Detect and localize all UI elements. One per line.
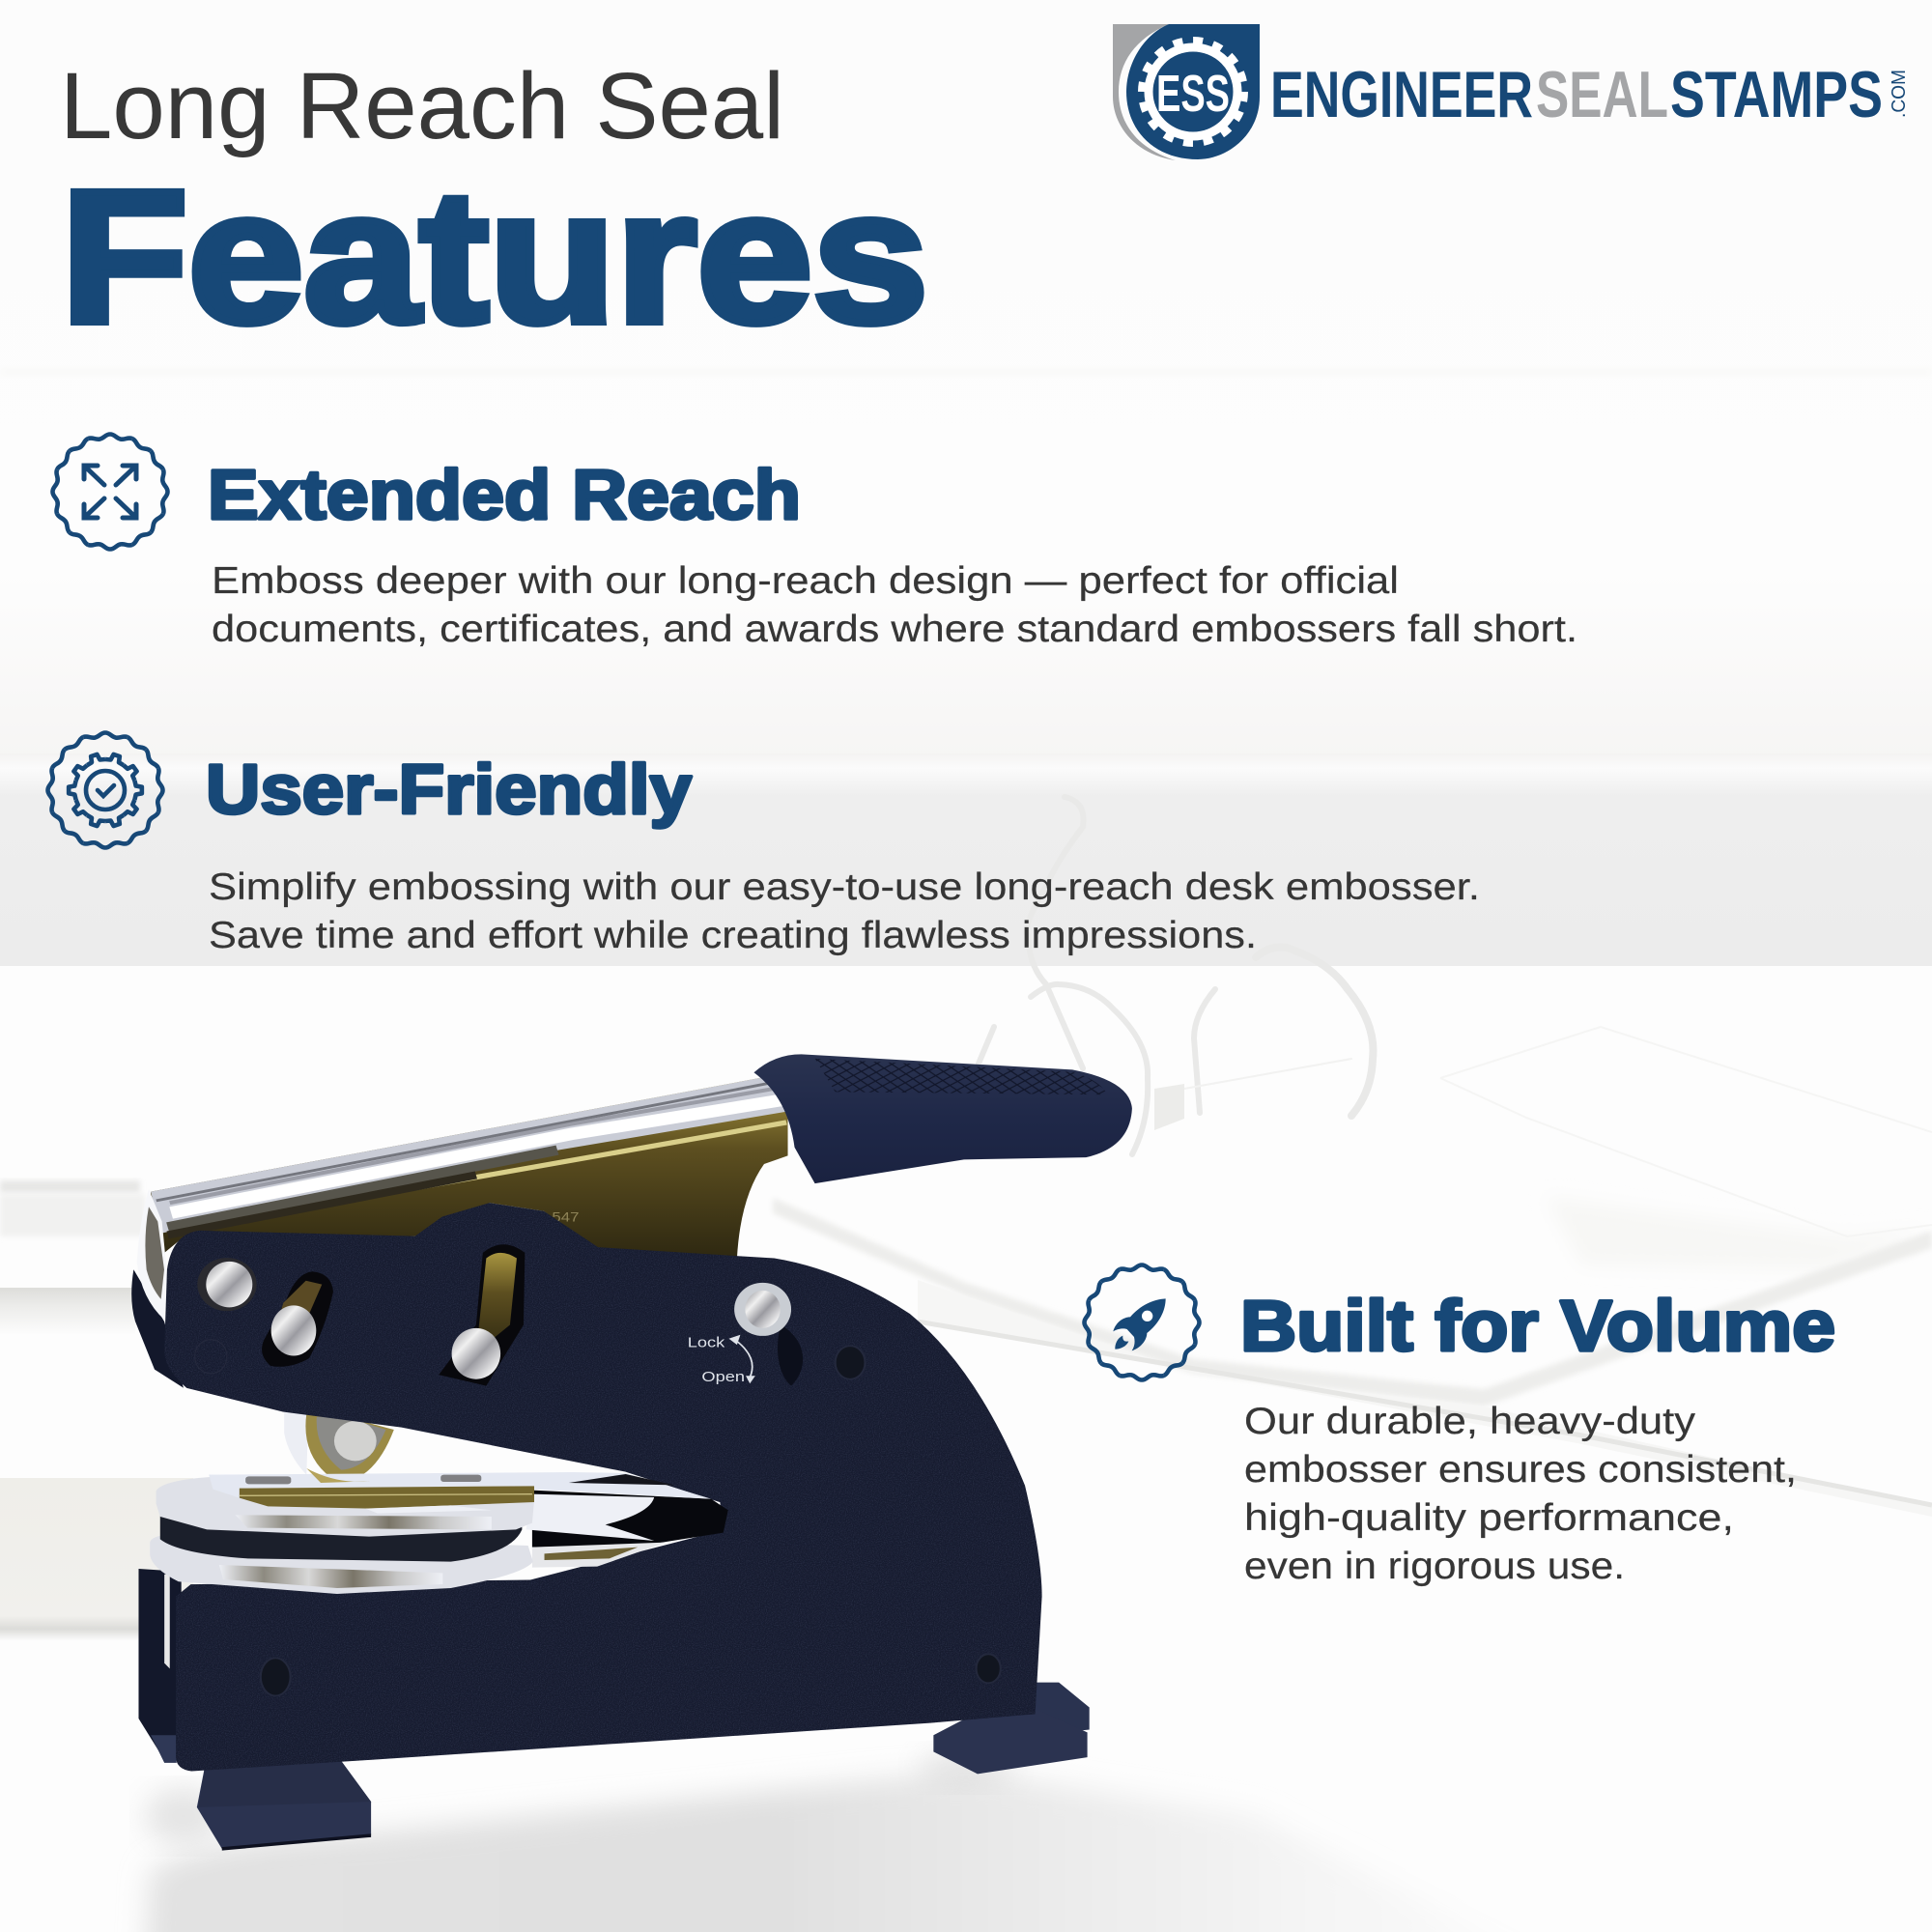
heading: Extended Reach bbox=[208, 457, 801, 534]
title line: Features: Features bbox=[61, 152, 928, 362]
rubber grip bbox=[753, 1054, 1132, 1183]
embosser product photo bbox=[131, 1054, 1132, 1851]
logo .com: .COM bbox=[1889, 70, 1910, 118]
description: high-quality performance, bbox=[1244, 1497, 1734, 1539]
rear plate lower bbox=[138, 1569, 182, 1763]
description: documents, certificates, and awards where standard embossers fall short. bbox=[212, 609, 1577, 650]
logo wordmark: STAMPS bbox=[1670, 58, 1883, 131]
rear rivets, lock slot and screws bbox=[261, 1244, 1001, 1695]
logo wordmark: SEAL bbox=[1536, 58, 1668, 131]
title bbox=[60, 53, 928, 362]
left foot bbox=[197, 1760, 371, 1851]
icon: gear with check bbox=[43, 728, 167, 852]
title line: Long Reach Seal: Long Reach Seal bbox=[60, 53, 784, 158]
logo shield: ESS bbox=[1156, 65, 1230, 123]
feature: Extended Reach bbox=[48, 430, 1577, 650]
icon: expanding arrows bbox=[48, 430, 172, 554]
feature: User-Friendly bbox=[43, 728, 1480, 956]
description: Save time and effort while creating flawless impressions. bbox=[209, 915, 1257, 956]
description: Our durable, heavy-duty bbox=[1244, 1401, 1696, 1442]
heading: User-Friendly bbox=[206, 752, 692, 829]
description: Simplify embossing with our easy-to-use long-reach desk embosser. bbox=[209, 867, 1480, 908]
embosser body bbox=[164, 1203, 1042, 1772]
feature: Built for Volume bbox=[1080, 1261, 1835, 1587]
jaw: die discs and plates bbox=[150, 1468, 728, 1594]
binder rings bbox=[979, 797, 1373, 1154]
front rivets bbox=[195, 1258, 333, 1374]
icon: rocket bbox=[1080, 1261, 1204, 1384]
right feet bbox=[933, 1683, 1090, 1774]
heading: Built for Volume bbox=[1240, 1286, 1835, 1366]
lock and open labels: Open bbox=[701, 1369, 745, 1385]
lock and open labels bbox=[688, 1334, 755, 1385]
logo: Engineer Seal Stamps bbox=[1113, 24, 1910, 160]
logo shield bbox=[1113, 24, 1260, 160]
logo wordmark: ENGINEER bbox=[1270, 58, 1533, 131]
description: embosser ensures consistent, bbox=[1244, 1449, 1797, 1491]
left paper stack bbox=[0, 1180, 193, 1640]
die pivot cup bbox=[284, 1410, 394, 1482]
handle bbox=[151, 1075, 788, 1259]
chrome handle end and rear arm bbox=[131, 1189, 184, 1388]
description: Emboss deeper with our long-reach design — perfect for official bbox=[212, 560, 1399, 602]
handle: 547 bbox=[552, 1210, 579, 1225]
right paper sheets bbox=[773, 1027, 1932, 1517]
description: even in rigorous use. bbox=[1244, 1546, 1625, 1587]
bottom floor shadow bbox=[145, 1771, 1565, 1932]
lock and open labels: Lock bbox=[688, 1334, 725, 1350]
